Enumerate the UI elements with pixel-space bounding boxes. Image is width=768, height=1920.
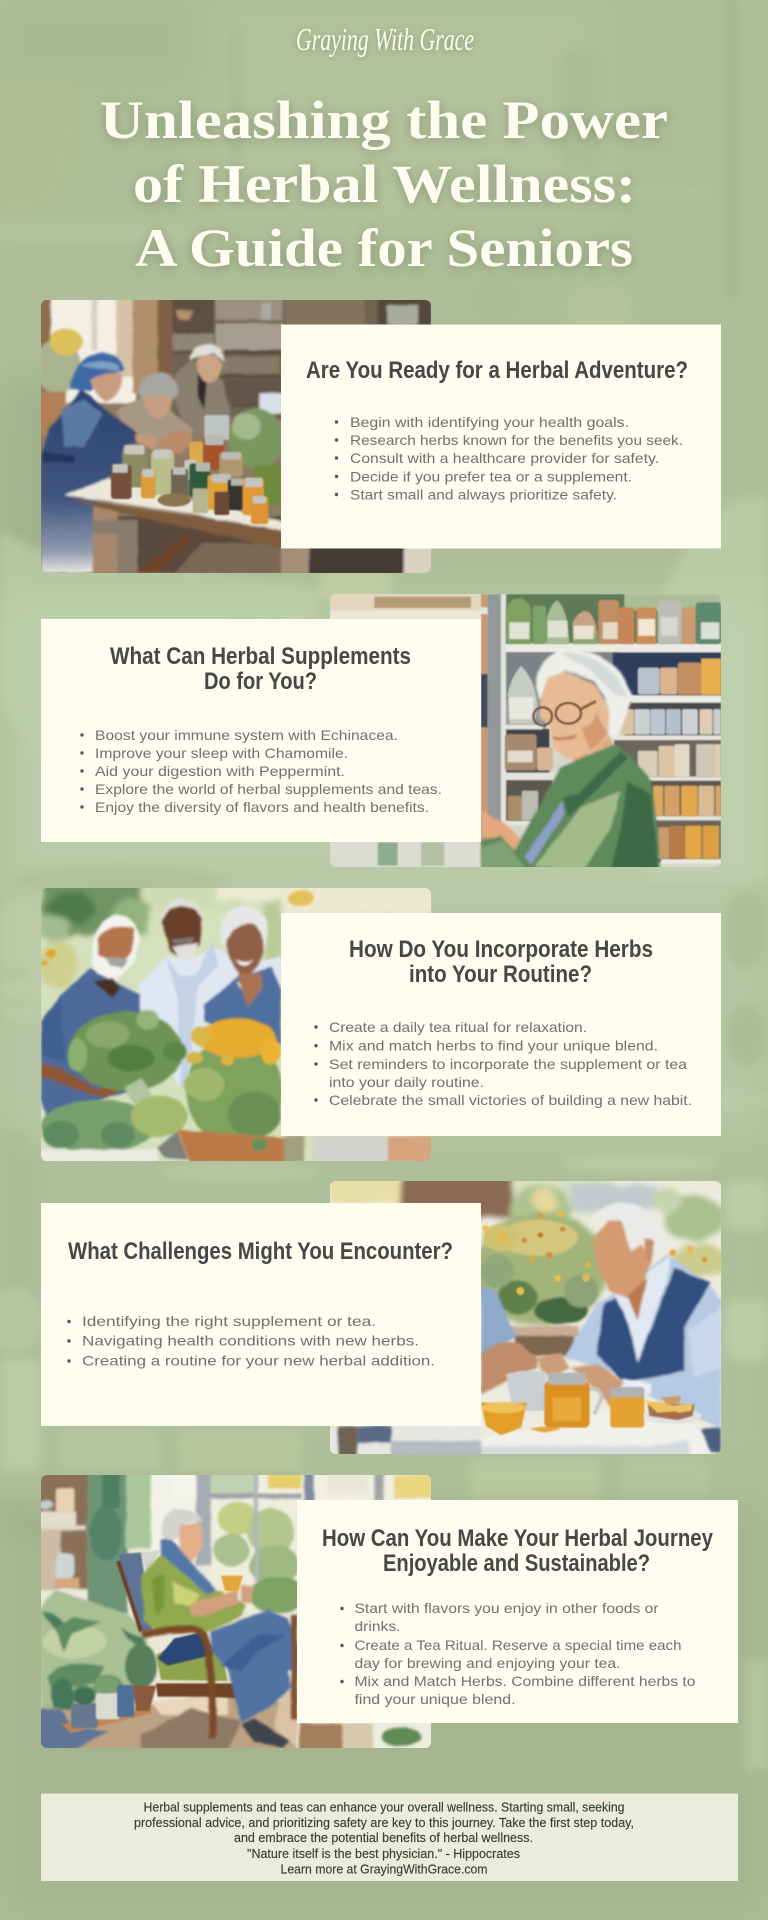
brand name: Graying With Grace bbox=[296, 21, 474, 57]
panel: herbal adventure bbox=[34, 297, 721, 575]
bullet list: Research herbs known for the benefits you seek. bbox=[350, 432, 683, 448]
bullet list: day for brewing and enjoying your tea. bbox=[354, 1655, 620, 1671]
bullet list: Begin with identifying your health goals. bbox=[350, 414, 629, 430]
heading: into Your Routine? bbox=[409, 961, 592, 988]
illustration: senior woman at supplement shelves bbox=[330, 594, 721, 871]
bullet list: Start small and always prioritize safety. bbox=[350, 486, 617, 502]
bullet list: Aid your digestion with Peppermint. bbox=[95, 763, 345, 779]
heading: What Can Herbal Supplements bbox=[110, 643, 411, 670]
panel: incorporating herbs bbox=[38, 881, 721, 1163]
heading: Are You Ready for a Herbal Adventure? bbox=[306, 357, 688, 384]
bullet list: Mix and Match Herbs. Combine different herbs to bbox=[354, 1673, 696, 1689]
heading: How Do You Incorporate Herbs bbox=[349, 936, 653, 963]
bullet list: into your daily routine. bbox=[329, 1074, 484, 1090]
heading bbox=[110, 643, 411, 695]
illustration: senior woman with tea in armchair bbox=[38, 1472, 438, 1750]
bullet list: Decide if you prefer tea or a supplement. bbox=[350, 468, 632, 484]
bullet list: Create a daily tea ritual for relaxation. bbox=[329, 1019, 587, 1035]
bullet list bbox=[340, 1600, 696, 1707]
heading bbox=[322, 1525, 714, 1577]
panel: challenges bbox=[41, 1174, 731, 1458]
heading: What Challenges Might You Encounter? bbox=[68, 1238, 453, 1265]
heading: Enjoyable and Sustainable? bbox=[383, 1550, 650, 1577]
title: A Guide for Seniors bbox=[135, 218, 633, 278]
bullet list: Navigating health conditions with new herbs. bbox=[82, 1333, 419, 1349]
bullet list: Create a Tea Ritual. Reserve a special time each bbox=[354, 1637, 682, 1653]
footer panel bbox=[41, 1794, 738, 1881]
heading bbox=[349, 936, 653, 988]
illustration: seniors sorting herb jars at a table bbox=[34, 297, 436, 575]
bullet list: Consult with a healthcare provider for safety. bbox=[350, 450, 659, 466]
text card bbox=[41, 1203, 481, 1426]
bullet list bbox=[335, 414, 683, 502]
bullet list: Mix and match herbs to find your unique blend. bbox=[329, 1038, 658, 1054]
closing text: Herbal supplements and teas can enhance your overall wellness. Starting small, seeking bbox=[144, 1800, 624, 1814]
closing text: "Nature itself is the best physician." - Hippocrates bbox=[247, 1846, 520, 1861]
bullet list: Identifying the right supplement or tea. bbox=[82, 1313, 376, 1329]
text card bbox=[281, 324, 721, 548]
closing text: and embrace the potential benefits of herbal wellness. bbox=[234, 1830, 533, 1845]
bullet list: Creating a routine for your new herbal addition. bbox=[82, 1352, 435, 1368]
text card bbox=[41, 619, 481, 842]
illustration: three smiling seniors with plants bbox=[38, 881, 438, 1163]
bullet list: Start with flavors you enjoy in other foods or bbox=[354, 1600, 659, 1616]
text card bbox=[281, 913, 721, 1136]
bullet list bbox=[67, 1313, 435, 1368]
closing text: Learn more at GrayingWithGrace.com bbox=[280, 1862, 488, 1876]
text card bbox=[297, 1500, 738, 1723]
bullet list: Boost your immune system with Echinacea. bbox=[95, 727, 398, 743]
panel: what supplements can do bbox=[41, 594, 721, 871]
bullet list: Explore the world of herbal supplements and teas. bbox=[95, 781, 442, 797]
heading: Do for You? bbox=[204, 668, 317, 695]
panel: enjoyable journey bbox=[38, 1472, 738, 1750]
bullet list: find your unique blend. bbox=[354, 1691, 516, 1707]
title: Unleashing the Power bbox=[100, 90, 668, 150]
bullet list bbox=[80, 727, 442, 815]
illustration: senior man at tea table bbox=[330, 1174, 731, 1458]
bullet list: Improve your sleep with Chamomile. bbox=[95, 745, 348, 761]
title bbox=[100, 90, 668, 278]
bullet list: Enjoy the diversity of flavors and health benefits. bbox=[95, 799, 429, 815]
bullet list: Set reminders to incorporate the supplement or tea bbox=[329, 1056, 687, 1072]
closing text bbox=[134, 1800, 634, 1876]
bullet list: drinks. bbox=[354, 1618, 400, 1634]
closing text: professional advice, and prioritizing safety are key to this journey. Take the first step today, bbox=[134, 1815, 634, 1830]
heading: How Can You Make Your Herbal Journey bbox=[322, 1525, 714, 1552]
bullet list: Celebrate the small victories of building a new habit. bbox=[329, 1092, 692, 1108]
title: of Herbal Wellness: bbox=[133, 154, 636, 214]
bullet list bbox=[314, 1019, 692, 1108]
